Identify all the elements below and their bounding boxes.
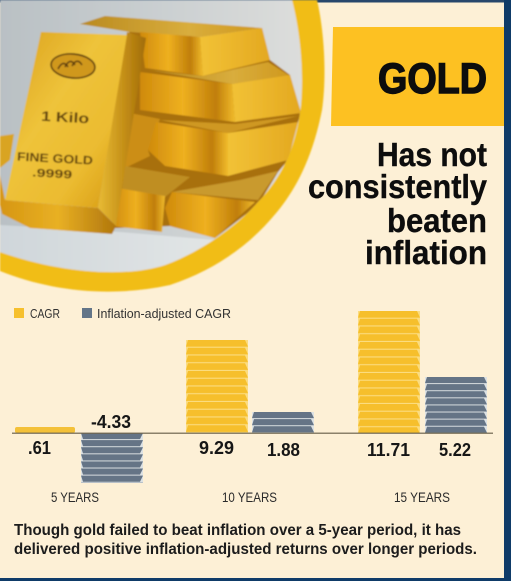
bar text: FINE GOLD (17, 150, 94, 168)
photo backdrop (0, 0, 302, 272)
main bar (0, 32, 146, 234)
bar values: 11.71 (367, 440, 410, 460)
yellow ring (0, 0, 324, 292)
subtitle: consistently (308, 168, 488, 205)
bar values: 5.22 (439, 440, 471, 460)
bar: third (148, 116, 298, 176)
bar values: .61 (28, 438, 51, 458)
gold stack base (100, 28, 301, 238)
axis (12, 433, 493, 434)
bar: low middle (112, 166, 190, 232)
bar values: 1.88 (267, 440, 300, 460)
subtitle: Has not (377, 136, 487, 173)
bar values: -4.33 (91, 412, 131, 432)
period labels: 5 YEARS (51, 489, 99, 505)
bar: low right (165, 171, 278, 238)
bar chart (12, 311, 493, 483)
subtitle: beaten (387, 202, 487, 239)
subtitle (308, 136, 488, 271)
period labels: 15 YEARS (394, 489, 450, 505)
bar text: 1 Kilo (41, 108, 90, 126)
heading band (331, 27, 504, 126)
legend (14, 306, 231, 321)
bar text: .9999 (32, 167, 72, 181)
footnote (14, 522, 477, 558)
photo: gold bars in circular frame (0, 0, 324, 292)
5 year inflation-adjusted bar (81, 433, 143, 483)
15 year CAGR bar (358, 311, 420, 433)
15 year inflation-adjusted bar (425, 377, 487, 433)
bar: far left sliver (0, 134, 14, 168)
bar: hidden behind main bar (125, 113, 160, 168)
period labels: 10 YEARS (222, 489, 277, 505)
title: GOLD: GOLD (378, 55, 487, 103)
period labels (51, 489, 450, 505)
footnote: Though gold failed to beat inflation over a 5-year period, it has (14, 522, 461, 539)
subtitle: inflation (365, 234, 487, 271)
10 year inflation-adjusted bar (252, 412, 314, 433)
bar values (28, 412, 471, 460)
legend: CAGR (30, 306, 60, 321)
bar values: 9.29 (199, 438, 234, 458)
10 year CAGR bar (186, 340, 248, 433)
bar: second (140, 62, 301, 122)
bar emblem (50, 52, 96, 80)
bar text (17, 110, 94, 180)
5 year CAGR bar (15, 427, 75, 433)
footnote: delivered positive inflation-adjusted returns over longer periods. (14, 541, 477, 558)
legend: Inflation-adjusted CAGR (97, 306, 231, 321)
bar: top back (80, 16, 270, 76)
